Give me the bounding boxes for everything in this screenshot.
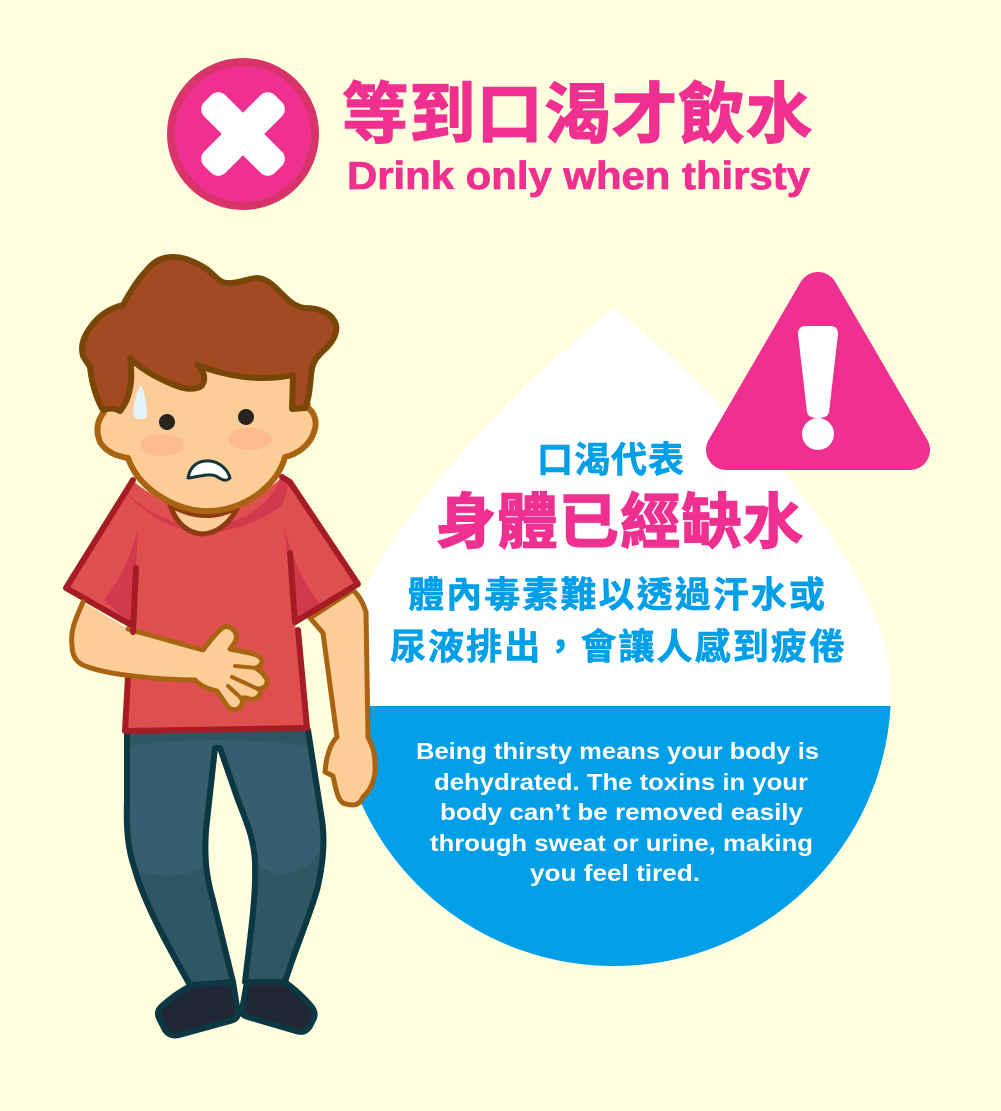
text: thirst message Chinese — [390, 439, 845, 667]
icon: warning triangle — [726, 292, 910, 450]
cheeks — [140, 434, 184, 456]
shirt — [66, 477, 358, 731]
hair — [82, 257, 336, 411]
head — [82, 257, 336, 511]
text: thirst message Chinese: 尿液排出，會讓人感到疲倦 — [390, 626, 845, 667]
panel: water drop — [330, 300, 900, 976]
text: thirst message English — [416, 738, 819, 886]
text: thirst message English: body can’t be removed easily — [440, 799, 803, 825]
mouth — [188, 461, 230, 480]
text: thirst message Chinese: 身體已經缺水 — [436, 489, 803, 556]
title — [342, 77, 812, 198]
right arm — [310, 590, 375, 805]
title: 等到口渴才飲水 — [342, 77, 812, 151]
left arm with hand — [72, 602, 267, 710]
text: thirst message English: Being thirsty means your body is — [416, 738, 819, 764]
icon: cross in circle — [171, 62, 315, 206]
eyes — [159, 414, 175, 430]
text: thirst message English: through sweat or urine, making — [430, 830, 813, 856]
sweat drop — [133, 385, 147, 419]
text: thirst message English: dehydrated. The toxins in your — [434, 769, 808, 795]
pants — [127, 730, 323, 985]
text: thirst message English: you feel tired. — [530, 860, 700, 886]
illustration: thirsty boy — [66, 257, 375, 1035]
text: thirst message Chinese: 體內毒素難以透過汗水或 — [408, 574, 825, 615]
text: thirst message Chinese: 口渴代表 — [537, 439, 684, 480]
shirt seams over arm — [133, 553, 295, 632]
shoes — [158, 982, 315, 1035]
title: Drink only when thirsty — [347, 155, 810, 198]
